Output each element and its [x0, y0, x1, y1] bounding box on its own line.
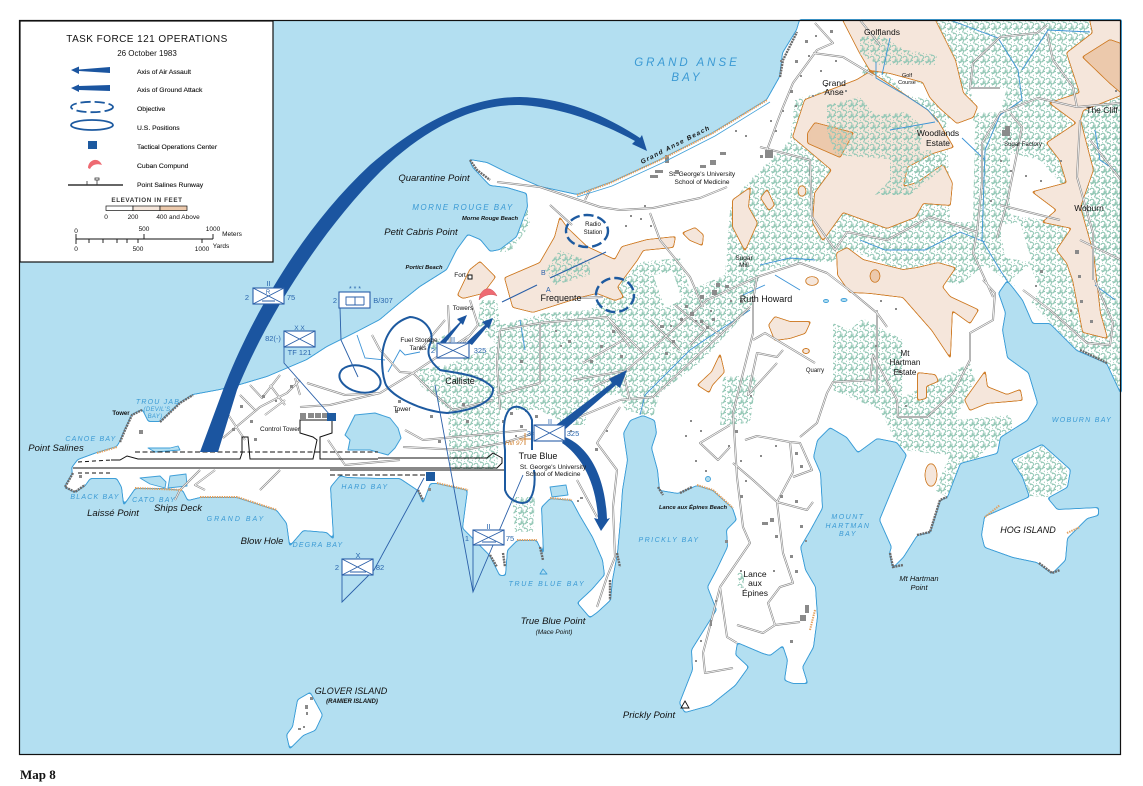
legend: distance scale: 0: [74, 246, 78, 253]
Prickly Point triangle: [681, 701, 689, 708]
unit: 2 X 82: 2: [335, 563, 339, 572]
legend: distance scale: 1000: [206, 226, 221, 233]
rivers and streams: [357, 20, 1115, 415]
place labels: Lance: [743, 569, 767, 579]
place labels: Fuel Storage: [400, 337, 438, 344]
Grand Anse beach inner shoreline: [577, 102, 770, 197]
leader lines: [284, 308, 523, 602]
legend: axis of air assault: Axis of Air Assault: [137, 69, 191, 76]
place labels: Épines: [742, 588, 768, 598]
place labels: Towers: [453, 305, 474, 312]
U.S. position True Blue: [504, 407, 535, 503]
water labels: HARD BAY: [341, 484, 389, 491]
A-B line: [502, 252, 606, 302]
legend: axis of ground attack: [71, 84, 203, 94]
water labels: PRICKLY BAY: [638, 537, 700, 544]
unit: 2 325 near Calliste: 2: [431, 346, 435, 355]
legend: Cuban compound: Cuban Compund: [137, 163, 189, 170]
place labels: The Cliff: [1086, 105, 1118, 115]
cleared white land patches: [653, 70, 1067, 330]
place labels: Golflands: [864, 27, 900, 37]
Hog Island vegetation: [1013, 446, 1069, 497]
legend: elevation scale: ELEVATION IN FEET: [111, 197, 183, 204]
water labels: BLACK BAY: [70, 494, 120, 501]
legend date: 26 October 1983: [117, 49, 177, 58]
unit: 82(-) TF 121: X X: [294, 325, 305, 332]
water labels: GRAND BAY: [207, 516, 265, 523]
place labels: Course: [898, 80, 916, 86]
place labels: True Blue: [519, 451, 557, 461]
legend: distance scale: 1000: [195, 246, 210, 253]
place labels: Grand Anse Beach: [640, 125, 712, 166]
Tactical operations center south: [426, 472, 435, 481]
unit: 2 325 near Calliste: [431, 335, 486, 358]
caption: Map 8: [20, 767, 56, 782]
place labels: Grand: [822, 78, 846, 88]
unit: 2 X 82: 82: [376, 563, 384, 572]
U.S. position west of Fuel Storage: [336, 361, 384, 397]
Lagoon near Point Salines runway: [345, 413, 401, 455]
U.S. position Calliste: [382, 317, 493, 413]
water labels: CANOE BAY: [65, 436, 117, 443]
arrow: ground attack toward Calliste west: [440, 315, 467, 345]
legend: Point Salines runway: Point Salines Runway: [137, 182, 204, 189]
unit: 2 325 near Calliste: 325: [474, 346, 486, 355]
legend: tactical operations center: [88, 141, 218, 151]
unit: 2 II R 75: R: [266, 290, 271, 296]
arrow: axis of air assault: [200, 97, 647, 452]
legend: elevation scale: 400 and Above: [156, 214, 200, 221]
Cuban compound: [479, 289, 497, 300]
vegetation over high ground: [545, 35, 1120, 285]
unit: 2 X 82: X: [355, 551, 361, 560]
water labels: WOBURN BAY: [1052, 417, 1112, 424]
elevation 400 ft and above: [808, 40, 1124, 282]
place labels: Sugar: [735, 255, 754, 262]
place labels: Golf: [902, 73, 913, 79]
place labels: Woodlands: [917, 128, 959, 138]
beaches: [97, 100, 1080, 630]
place labels: Tanks: [410, 345, 427, 352]
legend: Cuban compound: [88, 160, 189, 170]
legend: distance scale: Yards: [213, 243, 230, 250]
place labels: Petit Cabris Point: [384, 227, 458, 238]
place labels: Radio: [585, 222, 601, 228]
place labels: Control Tower: [260, 426, 301, 433]
place labels: School of Medicine: [675, 179, 730, 186]
water labels: BAY: [671, 72, 703, 84]
water labels: MOUNT: [831, 514, 865, 521]
place labels: School of Medicine: [526, 471, 581, 478]
unit: 82(-) TF 121: TF 121: [288, 348, 311, 357]
place labels: HOG ISLAND: [1000, 525, 1056, 535]
place labels: Lance aux Épines Beach: [659, 503, 727, 511]
water labels: MORNE ROUGE BAY: [412, 203, 514, 212]
place labels: Frequente: [540, 293, 582, 303]
place labels: Ruth Howard: [740, 294, 792, 304]
place labels: Estate: [926, 138, 950, 148]
place labels: Point Salines: [28, 443, 84, 454]
place labels: True Blue Point: [521, 616, 586, 627]
unit: 2 325 near Calliste: II: [451, 335, 455, 344]
place labels: Quarantine Point: [398, 173, 470, 184]
Tactical operations center north: [327, 413, 336, 421]
unit: 2 II R 75: 2: [245, 293, 249, 302]
unit: 3 325 True Blue: 3: [527, 429, 531, 438]
water labels: (DEVIL'S: [144, 407, 170, 413]
elevation contours 200 ft: [458, 20, 1121, 486]
legend: objective: [71, 102, 166, 113]
arrow: ground attack north east from True Blue: [552, 370, 627, 432]
unit: 2 II R 75: [245, 279, 295, 304]
unit: B/307: 2: [333, 296, 337, 305]
place labels: Prickly Point: [623, 710, 675, 721]
place labels: Hartman: [890, 358, 920, 367]
unit: 1 II R 75: 75: [506, 534, 514, 543]
roads: [175, 20, 1121, 673]
legend: U.S. positions: [71, 120, 180, 132]
unit: 1 II R 75: II: [486, 522, 491, 531]
legend: distance scale: 500: [133, 246, 144, 253]
unit: 2 II R 75: II: [266, 279, 271, 288]
rocky coasts: [65, 32, 1107, 600]
unit: 3 325 True Blue: [527, 417, 579, 441]
arrow: ground attack toward Calliste east: [467, 318, 493, 345]
legend: Point Salines runway: [68, 178, 204, 189]
objective: Radio Station: [566, 215, 608, 247]
place labels: Mt Hartman: [899, 574, 939, 583]
place labels: Ships Deck: [154, 503, 203, 514]
arrow: ground attack south from True Blue: [562, 437, 610, 531]
Hill 97 marker: [505, 433, 531, 447]
legend: distance scale: 500: [139, 226, 150, 233]
water labels: TRUE BLUE BAY: [509, 581, 585, 588]
place labels: St. George's University: [520, 464, 587, 471]
place labels: Fort: [454, 272, 466, 279]
unit: B/307: [333, 286, 393, 308]
place labels: Tower: [393, 406, 412, 413]
place labels: GLOVER ISLAND: [315, 686, 388, 696]
place labels: Portici Beach: [405, 265, 443, 271]
water labels: GRAND ANSE: [634, 57, 740, 69]
unit: 3 325 True Blue: 325: [567, 429, 579, 438]
place labels: Woburn: [1074, 203, 1104, 213]
legend: axis of ground attack: Axis of Ground Attack: [137, 87, 203, 94]
legend: elevation scale: 200: [128, 214, 139, 221]
water labels: CATO BAY: [132, 497, 176, 504]
A-B line: B: [541, 270, 546, 277]
unit: 2 II R 75: 75: [287, 293, 295, 302]
water labels: BAY: [839, 531, 857, 538]
legend: axis of air assault: [71, 66, 191, 76]
water labels: [65, 57, 1112, 588]
A-B line: A: [546, 287, 551, 294]
place labels: Laissé Point: [87, 508, 139, 519]
place labels: Morne Rouge Beach: [462, 216, 518, 222]
place labels: (RAMIER ISLAND): [326, 699, 378, 705]
legend: tactical operations center: Tactical Operations Center: [137, 144, 218, 151]
unit: 1 II R 75: 1: [465, 534, 469, 543]
place labels: Point: [910, 583, 928, 592]
legend: elevation scale: [104, 197, 200, 221]
unit: 3 325 True Blue: II: [548, 417, 552, 426]
fort symbol: [468, 275, 472, 279]
water labels: TROU JAB: [136, 399, 180, 406]
place labels: Blow Hole: [241, 536, 283, 547]
place labels: Mt: [901, 349, 910, 358]
place labels: Mill: [739, 262, 749, 269]
unit: 1 II R 75: [465, 522, 514, 545]
legend: distance scale: 0: [74, 228, 78, 235]
salt ponds: [140, 298, 847, 574]
legend: elevation scale: 0: [104, 214, 108, 221]
place labels: Quarry: [806, 368, 824, 374]
unit: B/307: * * *: [349, 286, 361, 293]
vegetation areas: [417, 20, 1121, 588]
place labels: Anse: [824, 87, 844, 97]
legend: U.S. positions: U.S. Positions: [137, 125, 180, 132]
water labels: DEGRA BAY: [293, 542, 344, 549]
unit: B/307: B/307: [373, 296, 393, 305]
Hill 97 marker: Hill 97: [505, 440, 523, 447]
place labels: Estate: [894, 368, 917, 377]
water labels: HARTMAN: [826, 523, 870, 530]
unit: 82(-) TF 121: 82(-): [265, 334, 281, 343]
unit: 2 X 82: [335, 551, 384, 575]
legend: distance scale: Meters: [222, 231, 243, 238]
legend: objective: Objective: [137, 106, 166, 113]
legend: distance scale: [74, 226, 243, 253]
place labels: Tower: [112, 411, 130, 417]
panel: legend: [20, 21, 273, 262]
place labels: Calliste: [445, 376, 475, 386]
Point Salines airfield runway: [73, 420, 505, 475]
place labels: (Mace Point): [536, 629, 572, 636]
place labels: aux: [748, 578, 763, 588]
unit: 82(-) TF 121: [265, 325, 315, 357]
place labels: St. George's University: [669, 171, 736, 178]
place labels: Sugar Factory: [1004, 142, 1042, 148]
place labels: Station: [584, 230, 602, 236]
objective: Frequente: [596, 278, 634, 312]
water labels: BAY): [148, 414, 162, 420]
legend title: TASK FORCE 121 OPERATIONS: [66, 34, 228, 45]
